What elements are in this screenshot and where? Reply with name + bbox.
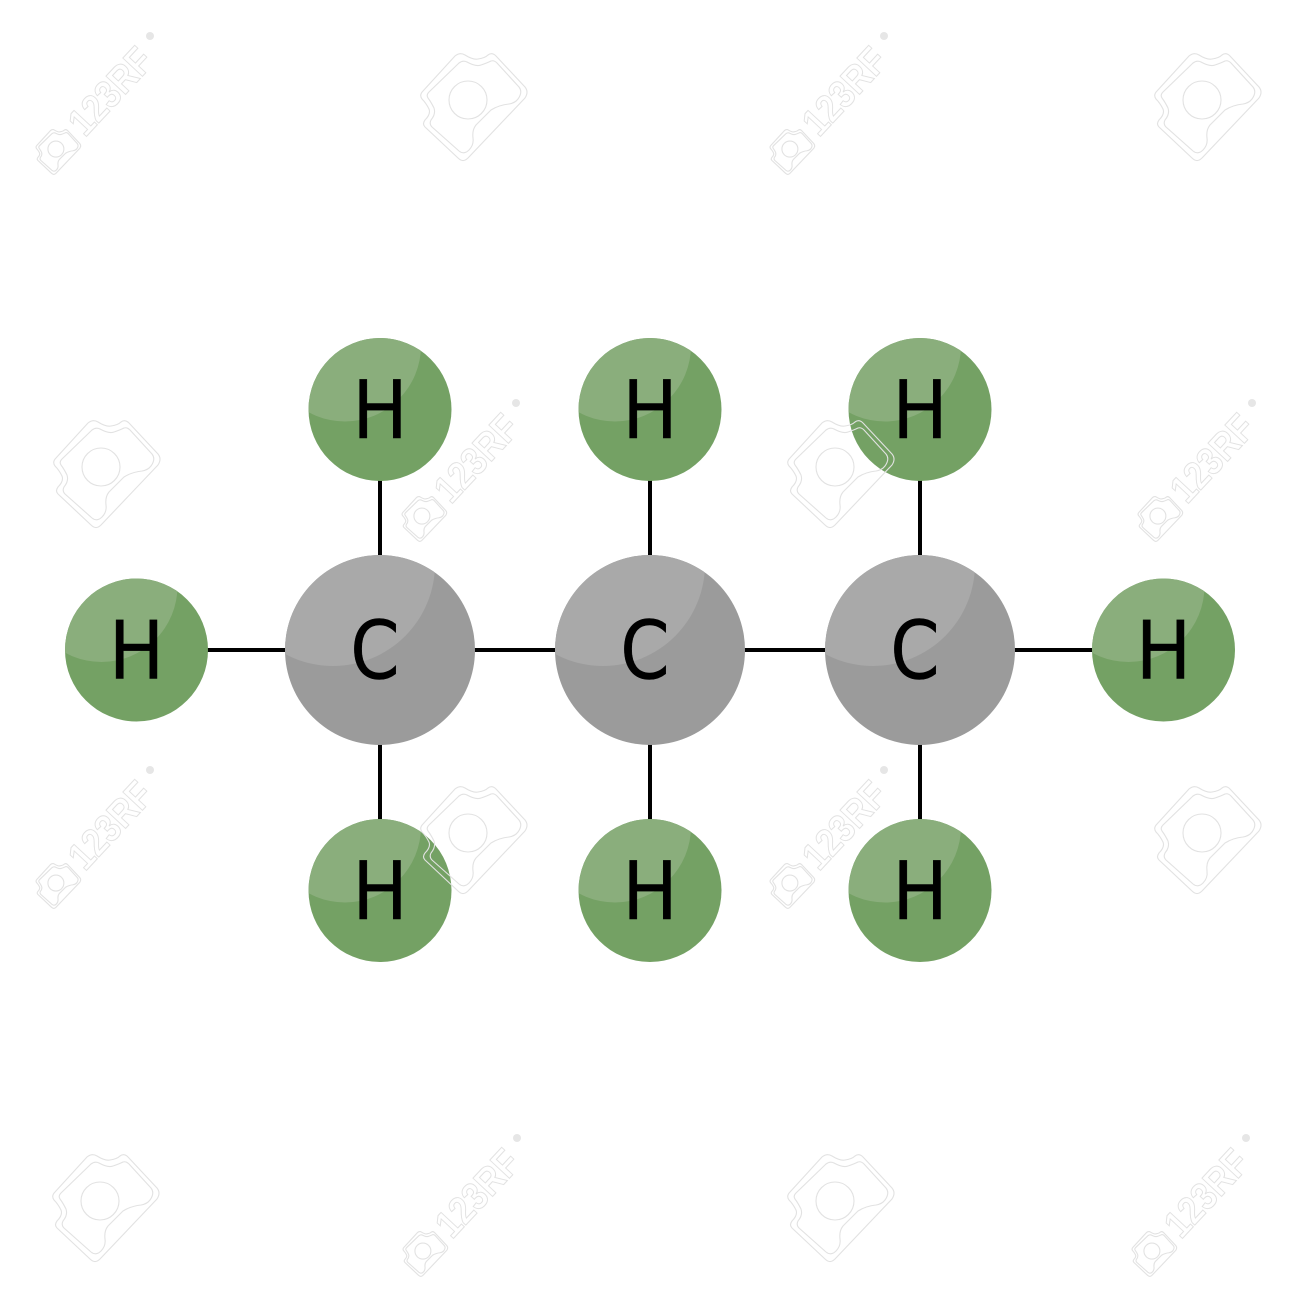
hydrogen atom top 1: H: [352, 365, 408, 458]
watermark layer: 123RF: [59, 39, 161, 144]
hydrogen atom bottom 3: H: [892, 846, 948, 939]
hydrogen atom left: H: [109, 606, 164, 698]
hydrogen atom top 2: H: [622, 365, 678, 458]
bonds: [136, 409, 1164, 890]
hydrogen atom right: [1092, 578, 1235, 722]
hydrogen atom right: H: [1136, 606, 1191, 698]
watermark layer: 123RF: [1161, 406, 1263, 511]
carbon atom 2: C: [620, 604, 670, 698]
carbon atom 3: C: [890, 604, 940, 698]
watermark layer: 123RF: [425, 406, 527, 511]
carbon atom 3: [825, 555, 1015, 745]
hydrogen atom bottom 2: [578, 819, 722, 962]
hydrogen atom left: [65, 578, 208, 722]
watermark layer: 123RF: [793, 39, 895, 144]
watermark layer: 123RF: [793, 773, 895, 878]
watermark layer: 123RF: [59, 773, 161, 878]
hydrogen atom top 1: [308, 338, 452, 481]
hydrogen atom top 3: H: [892, 365, 948, 458]
hydrogen atom bottom 1: H: [352, 846, 408, 939]
hydrogen atom top 2: [578, 338, 722, 481]
carbon atom 1: C: [350, 604, 400, 698]
watermark layer: 123RF: [426, 1141, 528, 1246]
carbon atom 2: [555, 555, 745, 745]
hydrogen atom bottom 2: H: [622, 846, 678, 939]
carbon atom 1: [285, 555, 475, 745]
hydrogen atom bottom 3: [848, 819, 992, 962]
watermark layer: 123RF: [1155, 1141, 1257, 1246]
hydrogen atom top 3: [848, 338, 992, 481]
hydrogen atom bottom 1: [308, 819, 452, 962]
